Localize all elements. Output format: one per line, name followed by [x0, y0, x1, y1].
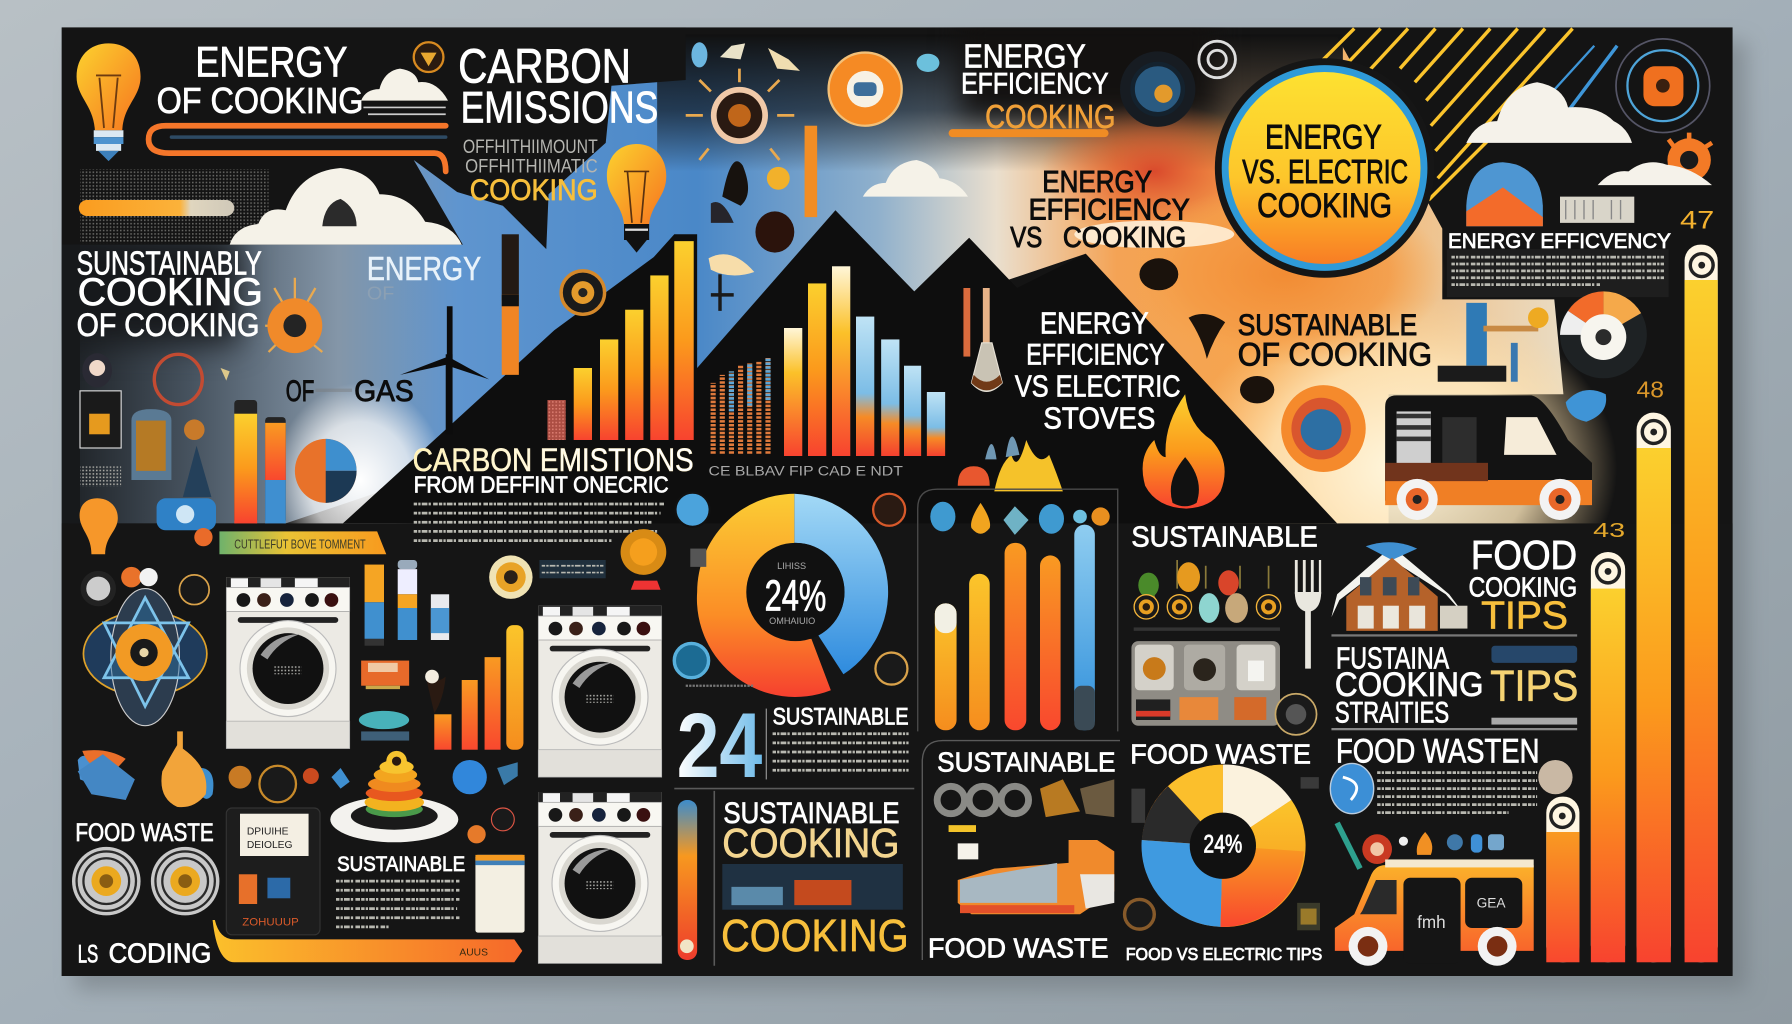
gradient banner — [219, 531, 386, 554]
icon: sun dial — [686, 69, 794, 160]
washing machine two — [538, 606, 662, 777]
heading: energy of cooking: OF COOKING — [157, 80, 363, 121]
heading: sustaina strategies tips — [1331, 641, 1578, 730]
text block: greeked carbon copy — [414, 504, 665, 541]
icon: orange orb — [621, 529, 666, 590]
rounded pipe bar — [149, 126, 446, 171]
icon: house dome — [1466, 162, 1543, 226]
text: sustainable of cooking: OF COOKING — [1238, 337, 1432, 373]
panel: sustainable cooking: SUSTAINABLE — [723, 797, 899, 830]
heading: energy efficiency electric stoves: ENERGY — [1040, 306, 1149, 341]
left small icons — [80, 353, 230, 497]
heading: carbon emissions: CARBON — [458, 40, 631, 93]
bar chart: thin segmented bars — [713, 358, 768, 454]
icon: round badge — [1275, 694, 1317, 735]
text block: greeked efficiency copy — [1447, 249, 1669, 297]
heading: carbon emistions from: CARBON EMISTIONS — [413, 442, 694, 478]
icon: orange van: GEA — [1477, 895, 1506, 910]
icon: blue gadget — [1566, 390, 1606, 422]
icon: phone panel — [226, 808, 320, 935]
text: of gas: OF — [286, 375, 314, 408]
small cloud with streaks — [361, 69, 448, 114]
icon: orange button — [829, 53, 902, 126]
chart: main donut — [697, 494, 888, 697]
heading: sustaina strategies tips: TIPS — [1490, 663, 1578, 711]
bar chart: rising orange bars — [434, 625, 523, 750]
icons: medallion row — [1134, 560, 1281, 631]
text: sustainable of cooking — [1238, 309, 1432, 373]
panel: sustainable cooking: COOKING — [722, 820, 899, 866]
panel: vertical bars with droplets — [918, 489, 1118, 731]
label: 47 and 48 — [1593, 207, 1714, 542]
chart: food waste donut — [1142, 765, 1306, 927]
small gold emblem — [414, 42, 443, 72]
heading: energy faded — [367, 251, 481, 303]
icon: top left light bulb — [77, 43, 141, 161]
gradient footer banner — [213, 920, 522, 962]
icon: orange sun — [265, 278, 322, 353]
callout: centre title disc: ENERGY — [1265, 119, 1382, 157]
icon: atom star — [83, 589, 207, 726]
bar chart: tall right bars — [1546, 245, 1718, 962]
label: sustainable centre: SUSTAINABLE — [1131, 521, 1318, 553]
top right target — [1616, 39, 1710, 133]
heading: energy efficiency dark — [1010, 164, 1190, 254]
small icons above phone — [229, 766, 350, 802]
small cloud centre — [863, 160, 968, 197]
heading: energy efficiency electric stoves: EFFICIENCY — [1026, 339, 1165, 372]
small flames and blue fins — [958, 437, 1063, 491]
gradient footer banner: AUUS — [459, 947, 488, 958]
icon: gold dial medallion — [489, 555, 533, 599]
callout: centre title disc — [1215, 58, 1434, 278]
heading: carbon emissions: OFFHITHIIMATIC — [465, 156, 598, 178]
heading: food cooking tips — [1331, 532, 1577, 638]
icons: twin spiral discs — [72, 847, 219, 915]
heading: carbon emistions from — [413, 442, 694, 498]
icon: fork — [1295, 560, 1321, 669]
icon: flask — [963, 288, 1002, 391]
label: food waste left: FOOD WASTE — [75, 819, 214, 847]
icon: centre light bulb — [607, 144, 666, 253]
chart: main donut: LIHISS — [777, 561, 806, 571]
heading: energy efficiency electric stoves: VS ELECTRIC — [1015, 369, 1181, 404]
halftone text band — [80, 169, 269, 243]
heading: energy faded: ENERGY — [367, 251, 481, 288]
black mountain silhouette — [343, 210, 1337, 523]
heading: sunstainably cooking — [77, 245, 263, 343]
icon: dark leaf and blob — [1189, 314, 1274, 403]
panel: sustainable cooking — [674, 789, 914, 966]
label: sustainable small: SUSTAINABLE — [337, 851, 465, 876]
donut side icons — [674, 493, 907, 686]
cloud lower right — [1598, 162, 1712, 185]
text block: greeked stat copy — [773, 734, 909, 770]
icon: big flame — [1143, 394, 1225, 509]
heading: sunstainably cooking: COOKING — [78, 271, 263, 314]
icon: house — [1331, 542, 1467, 631]
heading: energy of cooking: ENERGY — [195, 39, 347, 86]
heading: energy efficiency electric stoves: STOVES — [1043, 401, 1155, 436]
large cloud — [230, 168, 462, 245]
panel: sustainable cooking: COOKING — [721, 910, 909, 961]
label: 47 and 48: 48 — [1637, 377, 1664, 403]
icons: right of plate — [453, 760, 518, 843]
heading: energy faded: OF — [367, 282, 394, 303]
lower panel black base — [62, 523, 1733, 976]
heading: sustaina strategies tips: FUSTAINA — [1336, 641, 1449, 676]
icon: black food truck — [1385, 395, 1592, 520]
heading: food cooking tips: COOKING — [1469, 572, 1577, 603]
label: food vs electric tips: FOOD VS ELECTRIC TIPS — [1126, 944, 1322, 964]
caption under bars: CE BLBAV FIP CAD E NDT — [709, 463, 904, 478]
chart: main donut: 24% — [765, 572, 826, 620]
text: sustainable of cooking: SUSTAINABLE — [1238, 309, 1417, 342]
heading: food cooking tips: FOOD — [1471, 532, 1577, 578]
heading: carbon emistions from: FROM DEFFINT ONECRIC — [414, 472, 669, 498]
icon: orange van — [1335, 859, 1534, 966]
heading: food wasten: FOOD WASTEN — [1336, 732, 1539, 770]
washing machine three — [538, 792, 662, 963]
heading: energy efficiency vs cooking: ENERGY — [963, 38, 1086, 75]
heading: energy efficiency vs cooking: EFFICIENCY — [961, 68, 1109, 101]
icon: round chart dial — [1560, 291, 1647, 378]
panel: sustainable food waste: SUSTAINABLE — [937, 746, 1115, 777]
icon: phone panel: DEIOLEG — [247, 840, 293, 851]
text block: greeked food waste — [1377, 773, 1537, 813]
chart: main donut: OMHAIUIO — [769, 616, 815, 626]
icon: gear dial — [561, 271, 605, 314]
heading: energy efficiency vs cooking: COOKING — [985, 99, 1115, 136]
panel: sustainable food waste — [922, 741, 1120, 964]
screen strip — [539, 560, 606, 578]
heading: sustaina strategies tips: STRAITIES — [1335, 696, 1449, 729]
heading: energy efficiency dark: EFFICIENCY — [1029, 193, 1190, 226]
heading: carbon emissions: OFFHITHIIMOUNT — [463, 136, 598, 158]
heading: energy efficiency vs cooking — [949, 38, 1115, 137]
callout: centre title disc: VS. ELECTRIC — [1242, 154, 1408, 191]
icon: chimney pipe — [502, 234, 519, 375]
panel: sky gradient backdrop — [62, 27, 1613, 524]
donut 2 side icons — [1125, 777, 1320, 930]
label: coding: CODING — [109, 937, 211, 968]
washing machine one — [226, 577, 350, 749]
dark blob — [1139, 258, 1178, 290]
panel: sustainable food waste: FOOD WASTE — [928, 933, 1109, 964]
icon: phone panel: DPIUIHE — [247, 826, 289, 837]
heading: energy of cooking — [157, 39, 363, 121]
icon: cup — [475, 855, 525, 933]
heading: energy efficiency right: ENERGY EFFICVENCY — [1448, 228, 1671, 253]
diagonal yellow stripes — [1320, 29, 1617, 200]
food collage — [359, 661, 446, 741]
icon: blue swirl — [1330, 763, 1374, 814]
chart: food waste donut: 24% — [1203, 831, 1242, 859]
chart: small pie — [295, 439, 357, 503]
heading: sustaina strategies tips: COOKING — [1335, 666, 1483, 704]
heading: sunstainably cooking: SUNSTAINABLY — [77, 245, 262, 282]
icon: stacked pancakes on plate — [330, 751, 458, 842]
heading: energy efficiency dark: ENERGY — [1042, 164, 1152, 199]
label: 47 and 48: 43 — [1593, 519, 1625, 542]
row of small icons above van — [1337, 823, 1504, 869]
heading: carbon emissions — [458, 40, 658, 207]
icon: phone panel: ZOHUUUP — [242, 917, 299, 929]
decorative round badges row left — [83, 567, 209, 605]
icon: small shell badge — [1538, 760, 1573, 794]
divider — [766, 709, 767, 779]
label: coding: LS — [78, 940, 98, 968]
label: food waste middle: FOOD WASTE — [1130, 738, 1311, 769]
heading: carbon emissions: EMISSIONS — [461, 83, 658, 132]
heading: energy efficiency dark: VS — [1010, 222, 1042, 254]
panel: control screens — [1131, 641, 1280, 726]
icon: target — [1199, 41, 1235, 78]
bar chart: central mountain — [784, 266, 945, 456]
stat: big 24: 24 — [677, 695, 762, 797]
heading: energy efficiency electric stoves — [1015, 306, 1181, 436]
label: sustainable stat: SUSTAINABLE — [773, 704, 909, 731]
blue and orange food items — [78, 731, 213, 807]
icon: wind turbine — [400, 306, 489, 434]
heading: energy efficiency dark: COOKING — [1063, 222, 1186, 254]
icon: open book — [1560, 197, 1634, 223]
text: of gas — [286, 375, 414, 408]
text block: greeked sustainable — [336, 881, 459, 927]
heading: food cooking tips: TIPS — [1481, 595, 1568, 638]
callout: centre title disc: COOKING — [1257, 187, 1392, 225]
bar chart: stacked tubes — [365, 560, 449, 646]
icon: orange bulb — [80, 498, 118, 554]
icon: blue pump stand — [1438, 303, 1549, 382]
bar chart: first mountain — [547, 241, 694, 440]
heading: carbon emissions: COOKING — [470, 174, 598, 207]
icon: dark lens — [1120, 51, 1195, 127]
icon: orange van: fmh — [1417, 912, 1446, 932]
text: of gas: GAS — [354, 375, 414, 408]
floating ink blobs — [691, 42, 939, 311]
heading: sunstainably cooking: OF COOKING — [77, 307, 259, 343]
label: 47 and 48: 47 — [1680, 207, 1714, 235]
icon: orange gear — [1667, 133, 1712, 182]
gradient banner: CUTTLEFUT BOVE TOMMENT — [234, 538, 366, 552]
thin orange bar — [805, 126, 817, 217]
bar chart: left small bars — [234, 400, 286, 523]
icon: orange ring — [1281, 385, 1366, 472]
progress bar — [79, 200, 234, 216]
icon: blue tank — [157, 498, 216, 546]
cloud top right — [1466, 82, 1632, 143]
